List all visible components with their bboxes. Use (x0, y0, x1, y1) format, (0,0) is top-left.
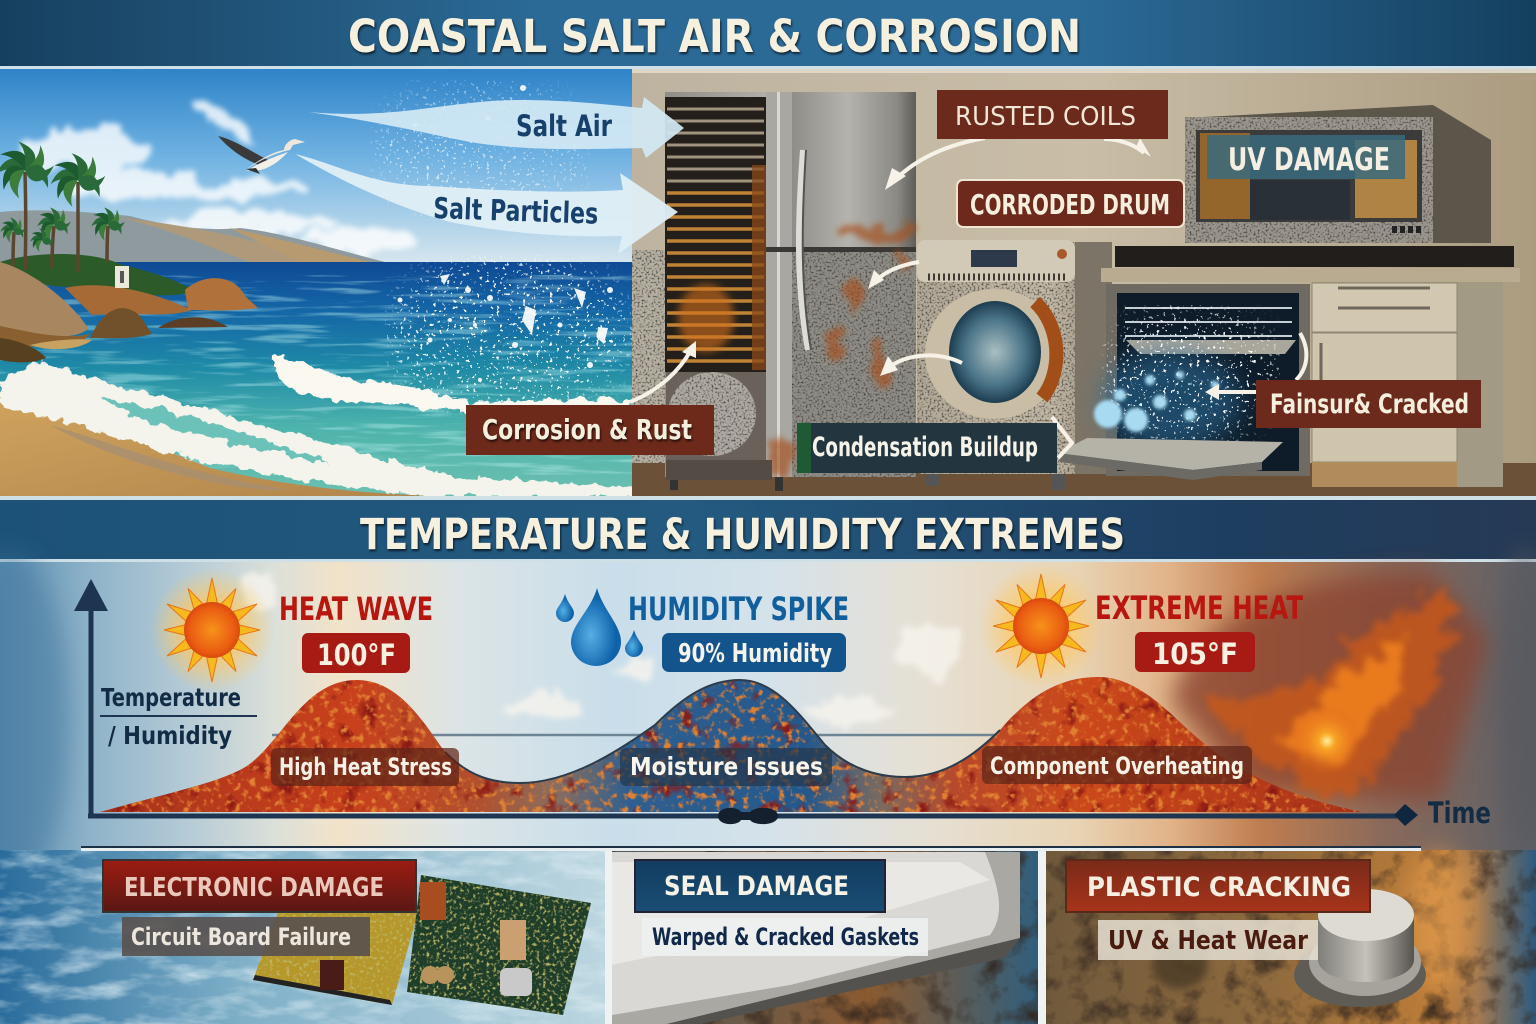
salt air arrow (308, 97, 684, 158)
label: uv and heat wear (1098, 920, 1318, 960)
label: moisture issues (620, 748, 832, 786)
cabinet and countertop (1101, 246, 1520, 487)
heading: humidity spike: HUMIDITY SPIKE (628, 590, 849, 628)
badge: 105F (1135, 632, 1255, 672)
label: component overheating: Component Overheating (990, 752, 1244, 780)
panel: timeline chart (0, 550, 1536, 890)
label: plastic cracking: PLASTIC CRACKING (1087, 872, 1351, 903)
breaking wave (270, 357, 630, 416)
icon: water drops (556, 588, 643, 666)
label: corrosion and rust: Corrosion & Rust (482, 413, 692, 446)
panel: seal damage (605, 850, 1046, 1024)
label: high heat stress: High Heat Stress (279, 753, 452, 781)
clouds (17, 93, 420, 252)
label: corroded drum (957, 180, 1184, 227)
reference line (272, 734, 1010, 736)
seagull (218, 136, 305, 174)
badge: 100F: 100°F (317, 638, 396, 672)
panel: plastic cracking (1046, 850, 1536, 1024)
vegetation (0, 254, 195, 295)
rocks (0, 262, 258, 362)
label: uv damage: UV DAMAGE (1228, 142, 1390, 178)
oven / dishwasher (1058, 284, 1310, 480)
washing machine (917, 240, 1112, 490)
label: circuit board failure: Circuit Board Failure (131, 923, 351, 951)
heading: extreme heat: EXTREME HEAT (1095, 589, 1303, 627)
label: moisture issues: Moisture Issues (630, 752, 823, 781)
title: temperature and humidity: TEMPERATURE & HUMIDITY EXTREMES (360, 510, 1125, 560)
fridge lower door (792, 252, 916, 477)
combined stress curves (100, 677, 1362, 812)
label: rusted coils (937, 90, 1168, 139)
sandy beach (0, 392, 470, 497)
salt spray (370, 80, 635, 415)
label: uv and heat wear: UV & Heat Wear (1108, 926, 1308, 956)
title: coastal salt air: COASTAL SALT AIR & CORROSION (348, 10, 1081, 63)
label: fan motor and cracked (1256, 380, 1481, 428)
axis label: temperature / humidity: / Humidity (108, 721, 232, 750)
label: electronic damage (103, 860, 416, 912)
salt particles arrow (295, 154, 678, 254)
open door (1058, 438, 1283, 470)
label: circuit board failure (122, 917, 370, 956)
rust patches (768, 225, 910, 476)
vertical steel divider (766, 92, 792, 477)
salt air label: Salt Air (516, 109, 613, 143)
label: warped and cracked gaskets (642, 918, 928, 956)
label: electronic damage: ELECTRONIC DAMAGE (124, 873, 384, 903)
blower drum (666, 372, 766, 464)
label: warped and cracked gaskets: Warped & Cracked Gaskets (652, 923, 919, 951)
label: uv damage (1207, 135, 1405, 179)
drum door (925, 289, 1063, 419)
label: component overheating (982, 746, 1252, 784)
axis label: temperature / humidity: Temperature (101, 683, 241, 712)
left vent grille (665, 97, 766, 372)
panel: kitchen background (632, 69, 1536, 497)
icon: cracked knob (1294, 889, 1426, 1007)
hills (0, 210, 385, 264)
badge: 105F: 105°F (1152, 637, 1238, 671)
circuit board (253, 875, 591, 1015)
palm trees (0, 140, 126, 272)
curve edge line (445, 680, 1000, 783)
axes (74, 579, 1418, 826)
shore foam (0, 359, 640, 497)
badge: 90 percent humidity (662, 633, 846, 672)
label: condensation buildup: Condensation Buildup (812, 432, 1038, 463)
label: condensation buildup (797, 423, 1057, 473)
axis label: temperature / humidity (100, 683, 257, 750)
label: rusted coils: RUSTED COILS (955, 102, 1136, 132)
second banner (0, 496, 1536, 562)
panel: beach scene (0, 69, 640, 497)
microwave (1185, 105, 1491, 243)
smoke and fire (1170, 550, 1536, 850)
clouds (242, 568, 964, 726)
top banner (0, 0, 1536, 69)
label: fan motor and cracked: Fainsur& Cracked (1270, 389, 1469, 420)
axis label: time: Time (1428, 796, 1491, 830)
icon: sun left (150, 568, 274, 692)
divider rule (81, 846, 1421, 851)
arrows on kitchen (630, 138, 1306, 458)
salt particles label: Salt Particles (433, 191, 599, 231)
label: seal damage: SEAL DAMAGE (664, 871, 849, 902)
lighthouse (115, 266, 129, 288)
panel: electronic damage (0, 850, 605, 1024)
badge: 90 percent humidity: 90% Humidity (678, 639, 832, 669)
condensation splash (1100, 350, 1240, 450)
label: high heat stress (271, 748, 459, 786)
refrigerator (665, 92, 916, 491)
sea (0, 262, 640, 497)
label: corroded drum: CORRODED DRUM (970, 188, 1170, 221)
heading: heat wave: HEAT WAVE (279, 590, 433, 628)
label: seal damage (635, 860, 885, 912)
handle (799, 150, 808, 350)
label: corrosion and rust (466, 405, 714, 455)
icon: sun right (979, 564, 1103, 688)
fridge upper door (792, 92, 916, 247)
gasket frame (612, 852, 1020, 1024)
label: plastic cracking (1066, 860, 1370, 912)
